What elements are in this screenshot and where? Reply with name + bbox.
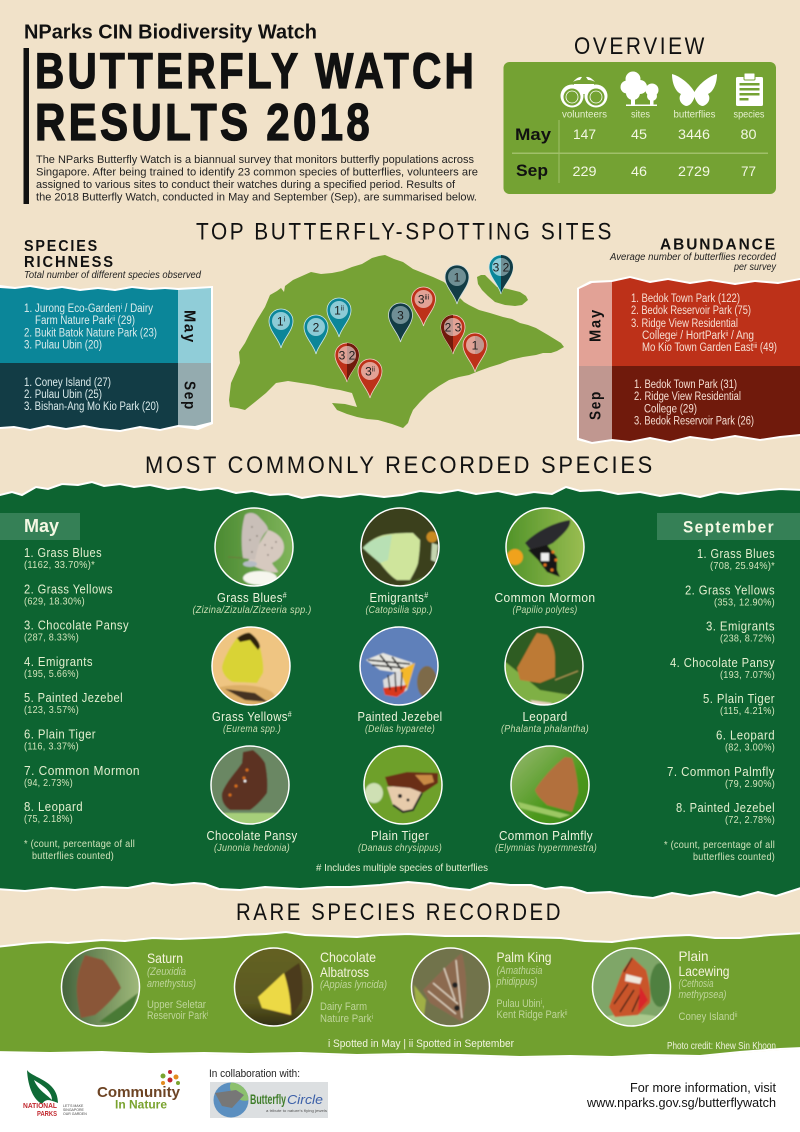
intro text (36, 154, 478, 204)
pin: 2 species richness: 2 (313, 320, 320, 334)
list: September species: 2. Grass Yellows (685, 582, 775, 597)
text: Palm King (496, 949, 568, 1021)
list: May sites: ii (112, 316, 115, 323)
species labels: # (283, 591, 287, 600)
species labels: (Eurema spp.) (223, 723, 281, 735)
list: May species: 3. Chocolate Pansy (24, 618, 129, 633)
list: May sites: i (121, 304, 122, 311)
text: Plain Lacewing (678, 948, 738, 1023)
list: September species (667, 546, 775, 826)
pin: 3 iii abundance: 3 (418, 292, 425, 306)
row: May (515, 125, 757, 144)
list: May abundance: ii (726, 331, 729, 338)
pin: 2 species richness (304, 315, 328, 354)
pin: 3 species richness (388, 303, 412, 342)
list: September species: 1. Grass Blues (697, 546, 775, 561)
species labels: (Danaus chrysippus) (358, 842, 442, 854)
pin: 2 3 abundance: 2 3 (445, 320, 462, 334)
list: May abundance: / HortPark (677, 330, 726, 342)
text: Plain Lacewing: ii (735, 1012, 738, 1019)
footer background (0, 1049, 800, 1132)
logo: ButterflyCircle: Circle (287, 1092, 323, 1107)
text: Saturn: Reservoir Park (147, 1010, 220, 1022)
text: Saturn: Upper Seletar (147, 999, 206, 1011)
panel: rare species recorded (0, 932, 800, 1057)
panel: species richness (0, 285, 213, 432)
list: May sites: / Dairy (122, 303, 153, 315)
text: Saturn: Saturn (147, 950, 183, 966)
species labels: Painted Jezebel (358, 709, 442, 724)
list: May sites: (29) (115, 315, 135, 327)
intro text: the 2018 Butterfly Watch, conducted in May and September (Sep), are summarised below. (36, 192, 477, 204)
species labels: (Phalanta phalantha) (501, 723, 589, 735)
species labels: Emigrants (370, 590, 432, 605)
pin: 3 2 Pulau Ubin: 3 2 (493, 260, 510, 274)
column labels: butterflies (674, 110, 716, 120)
species labels: Grass Blues (217, 590, 292, 605)
list: May species: 6. Plain Tiger (24, 726, 96, 742)
list: September species: 6. Leopard (716, 728, 775, 742)
panel: abundance (577, 276, 800, 444)
list: May species: (195, 5.66%) (24, 668, 79, 680)
list: May species (24, 545, 140, 825)
list: May abundance: i (676, 331, 678, 338)
list: September species: 5. Plain Tiger (703, 691, 775, 706)
pin: 2 3 abundance (441, 315, 465, 354)
icon: trees (620, 72, 658, 106)
species labels: (Elymnias hypermnestra) (495, 842, 597, 854)
heading: abundance: ABUNDANCE (660, 236, 777, 254)
list: September species: 7. Common Palmfly (667, 764, 775, 779)
subtitle: NParks CIN Biodiversity Watch (24, 22, 317, 44)
text: Palm King: Pulau Ubin (496, 998, 550, 1010)
intro text: The NParks Butterfly Watch is a biannual survey that monitors butterfly populations across (36, 154, 474, 166)
list: May sites: 2. Bukit Batok Nature Park (23) (24, 328, 157, 340)
list: May abundance: (49) (757, 342, 777, 354)
species labels: Common Mormon (494, 590, 596, 605)
tag: September: September (683, 518, 775, 536)
tag: May: May (24, 516, 59, 536)
list: May species: 8. Leopard (24, 799, 83, 814)
note: May (24, 838, 135, 862)
text: Plain Lacewing: Lacewing (678, 963, 730, 979)
note: multiple species: # Includes multiple species of butterflies (316, 862, 488, 874)
list: Sep sites: 2. Pulau Ubin (25) (24, 389, 102, 401)
pin: 3 iii abundance: iii (425, 294, 430, 302)
photo: Grass Blues (215, 508, 293, 586)
heading: top sites: TOP BUTTERFLY-SPOTTING SITES (196, 218, 614, 246)
row: Sep: 46 (631, 163, 647, 179)
logo: National Parks: PARKS (37, 1111, 57, 1118)
text: Palm King: i (541, 999, 542, 1006)
list: May species: 5. Painted Jezebel (24, 690, 123, 705)
text: Palm King: , (542, 998, 544, 1010)
list: September species: (193, 7.07%) (720, 669, 775, 681)
list: Sep abundance (634, 379, 754, 428)
row: Sep: 229 (572, 163, 597, 179)
list: September species: 8. Painted Jezebel (676, 800, 775, 815)
pin: 3 2 Pulau Ubin (489, 255, 513, 294)
tab: Sep: Sep (588, 390, 604, 420)
pin: 3 ii abundance (358, 359, 382, 398)
tag: May (0, 513, 80, 540)
list: May species: 1. Grass Blues (24, 545, 102, 560)
logo: National Parks: LET'S MAKE (63, 1104, 84, 1108)
more information (586, 1080, 776, 1110)
list: September species: (238, 8.72%) (720, 633, 775, 645)
pin: 1 abundance (463, 333, 487, 372)
logo: ButterflyCircle: Butterfly (250, 1091, 286, 1107)
logo: ButterflyCircle (210, 1082, 328, 1118)
more information: For more information, visit (630, 1080, 776, 1095)
list: May abundance: iii (753, 343, 758, 350)
species labels: (Papilio polytes) (512, 604, 578, 616)
text: Chocolate Albatross: (Appias lyncida) (320, 979, 387, 991)
text: Chocolate Albatross: Chocolate (320, 949, 376, 965)
note: September: * (count, percentage of all (664, 839, 775, 851)
species labels: Grass Yellows (212, 709, 299, 724)
pin: 1 ii species richness: 1 (334, 304, 341, 318)
list: May abundance (631, 293, 777, 354)
pin: 1 i species richness: i (284, 316, 286, 324)
photo: Common Palmfly (509, 744, 591, 826)
title block: RESULTS 2018 (35, 94, 373, 152)
text: Saturn: i (207, 1011, 208, 1018)
photo credit: Photo credit: Khew Sin Khoon (667, 1041, 776, 1052)
list: Sep sites (24, 377, 159, 413)
species labels (192, 590, 597, 854)
list: Sep abundance: 2. Ridge View Residential (634, 391, 741, 403)
list: May species: 7. Common Mormon (24, 763, 140, 778)
overview heading: OVERVIEW (574, 33, 707, 60)
pin: 3 ii abundance: ii (372, 366, 375, 374)
list: May species: (287, 8.33%) (24, 632, 79, 644)
pin: 1 i species richness (269, 309, 293, 348)
heading: abundance: per survey (733, 262, 777, 273)
title block (24, 43, 477, 204)
list: May abundance: Mo Kio Town Garden East (642, 342, 775, 354)
list: May sites (24, 303, 157, 352)
list: September species: (353, 12.90%) (714, 596, 775, 608)
pin: 1 ii species richness: ii (341, 306, 344, 312)
tab: May: May (180, 310, 198, 344)
text: Saturn (147, 950, 208, 1022)
list: May species: 4. Emigrants (24, 654, 93, 669)
heading: species richness: Total number of different species observed (24, 270, 201, 281)
species labels: Leopard (522, 709, 568, 724)
text: Plain Lacewing: (Cethosia (678, 978, 714, 990)
column labels: volunteers (562, 110, 607, 120)
photo: Painted Jezebel (358, 625, 440, 707)
panel: overview (504, 62, 776, 194)
text: Chocolate Albatross: i (372, 1014, 373, 1021)
list: May abundance: 3. Ridge View Residential (631, 318, 738, 330)
row: May: 3446 (678, 126, 710, 142)
list: Sep abundance: 1. Bedok Town Park (31) (634, 379, 737, 391)
row: May: 45 (631, 126, 647, 142)
text: Chocolate Albatross: Dairy Farm (320, 1001, 367, 1013)
text: Palm King: Palm King (496, 949, 552, 965)
pin: 3 iii abundance (412, 287, 436, 326)
pin: 1 abundance: 1 (472, 338, 479, 352)
species labels: # (288, 710, 292, 719)
photo: Emigrants (359, 506, 441, 590)
species labels: # (424, 591, 429, 600)
row: May: 147 (573, 126, 596, 142)
text: Chocolate Albatross: Nature Park (320, 1013, 379, 1025)
island: Pulau Ubin (477, 275, 528, 306)
row: Sep: Sep (516, 161, 548, 180)
list: May species: (629, 18.30%) (24, 595, 85, 607)
map of Singapore (229, 255, 564, 428)
heading: species richness: RICHNESS (24, 254, 115, 271)
list: Sep abundance: College (29) (644, 404, 697, 416)
pin: 1 ii species richness (327, 298, 351, 337)
list: September species: 3. Emigrants (706, 619, 775, 634)
collaboration label: In collaboration with: (209, 1068, 300, 1080)
list: May species: (94, 2.73%) (24, 777, 73, 789)
list: May sites: 3. Pulau Ubin (20) (24, 340, 102, 352)
species labels: Chocolate Pansy (206, 828, 298, 843)
list: May species: (75, 2.18%) (24, 813, 73, 825)
row: May: 80 (740, 126, 757, 142)
text: Chocolate Albatross (320, 949, 387, 1025)
pin: 3 species richness: 3 (397, 308, 404, 322)
pin: 1 species richness Sep: 1 (454, 270, 461, 284)
species labels: (Catopsilia spp.) (366, 604, 432, 616)
photo: Leopard (504, 626, 584, 706)
pin: 3 ii abundance: 3 (365, 364, 372, 378)
note: September (664, 839, 775, 863)
text: Plain Lacewing: Plain (678, 948, 708, 964)
column labels: species (734, 110, 764, 120)
photo: Grass Yellows (211, 626, 291, 706)
panel: most commonly recorded species (0, 482, 800, 898)
intro text: assigned to various sites to conduct their watches during a specified period. Results of (36, 179, 456, 191)
row: Sep (516, 161, 756, 180)
icon: butterfly (672, 74, 717, 106)
list: September species: (79, 2.90%) (725, 778, 775, 790)
photo: Saturn (59, 946, 142, 1028)
pin: 1 species richness Sep (445, 265, 469, 304)
species labels: (Zizina/Zizula/Zizeeria spp.) (192, 604, 312, 616)
column labels (562, 110, 764, 120)
list: September species: (82, 3.00%) (725, 742, 775, 754)
species labels: Common Palmfly (499, 828, 593, 843)
list: Sep sites: 1. Coney Island (27) (24, 377, 111, 389)
heading: most common: MOST COMMONLY RECORDED SPECIES (145, 452, 655, 479)
species labels: (Junonia hedonia) (214, 842, 290, 854)
list: May species: (1162, 33.70%)* (24, 559, 95, 571)
list: May species: (123, 3.57%) (24, 704, 79, 716)
list: September species: (72, 2.78%) (725, 814, 775, 826)
column labels: sites (631, 110, 650, 120)
logo: ButterflyCircle: a tribute to nature's flying jewels (266, 1108, 327, 1113)
list: September species: 4. Chocolate Pansy (670, 655, 775, 670)
list: May sites: Farm Nature Park (35, 315, 126, 327)
heading: abundance: Average number of butterflies recorded (609, 252, 776, 263)
photo: Palm King (409, 946, 492, 1028)
list: May abundance: 2. Bedok Reservoir Park (75) (631, 305, 751, 317)
heading: species richness: SPECIES (24, 238, 99, 255)
heading: species richness (24, 238, 201, 281)
text: Palm King: (Amathusia (496, 965, 542, 977)
icon: binoculars (560, 77, 608, 108)
logo: Community In Nature: In Nature (115, 1098, 167, 1112)
logo: Community In Nature: Community (97, 1084, 181, 1101)
photo: Plain Tiger (362, 744, 444, 826)
note: May: * (count, percentage of all (24, 838, 135, 850)
more information: www.nparks.gov.sg/butterflywatch (586, 1095, 776, 1110)
photo: Chocolate Pansy (209, 744, 291, 827)
pin: 3 2 abundance (335, 343, 359, 382)
row: Sep: 2729 (678, 163, 710, 179)
pin: 3 2 abundance: 3 2 (339, 348, 356, 362)
row: May: May (515, 125, 552, 144)
list: Sep abundance: 3. Bedok Reservoir Park (26) (634, 416, 754, 428)
list: May sites: 1. Jurong Eco-Garden (24, 303, 137, 315)
footnote: spotted key: i Spotted in May | ii Spotted in September (328, 1038, 514, 1050)
text: Plain Lacewing: methypsea) (678, 989, 727, 1001)
icon: clipboard (736, 73, 763, 106)
list: May species: 2. Grass Yellows (24, 581, 113, 596)
text: Palm King: ii (565, 1010, 568, 1017)
logo: National Parks: OUR GARDEN (63, 1112, 87, 1116)
note: May: butterflies counted) (32, 850, 114, 862)
list: May species: (116, 3.37%) (24, 740, 79, 752)
heading: abundance (609, 236, 777, 273)
pin: 1 i species richness: 1 (277, 314, 284, 328)
heading: rare species: RARE SPECIES RECORDED (236, 899, 563, 926)
species labels: (Delias hyparete) (365, 723, 435, 735)
title block: BUTTERFLY WATCH (35, 43, 477, 99)
text: Saturn: (Zeuxidia (147, 966, 186, 978)
note: September: butterflies counted) (693, 851, 775, 863)
species labels: Plain Tiger (371, 828, 429, 843)
logo: National Parks: SINGAPORE (63, 1108, 84, 1112)
list: September species: (708, 25.94%)* (710, 560, 775, 572)
tag: September (657, 513, 800, 540)
text: Saturn: amethystus) (147, 978, 196, 990)
logo: National Parks: NATIONAL (23, 1103, 58, 1110)
tab: Sep: Sep (180, 381, 198, 411)
intro text: Singapore. After being trained to identify 23 common species of butterflies, volunteers are (36, 166, 478, 178)
text: Chocolate Albatross: Albatross (320, 964, 369, 980)
photo: Plain Lacewing (590, 946, 673, 1030)
logo: National Parks (23, 1070, 87, 1118)
photo: Chocolate Albatross (232, 946, 315, 1028)
row: Sep: 77 (741, 163, 756, 179)
logo: Community In Nature (97, 1070, 181, 1112)
photo: Common Mormon (504, 506, 586, 588)
tab: May: May (588, 308, 604, 342)
list: May abundance: College (642, 330, 681, 342)
list: Sep sites: 3. Bishan-Ang Mo Kio Park (20) (24, 401, 159, 413)
list: May abundance: 1. Bedok Town Park (122) (631, 293, 740, 305)
list: September species: (115, 4.21%) (720, 705, 775, 717)
text: Plain Lacewing: Coney Island (678, 1011, 743, 1023)
text: Palm King: phidippus) (496, 976, 538, 988)
list: May abundance: / Ang (728, 330, 754, 342)
text: Palm King: Kent Ridge Park (496, 1009, 577, 1021)
